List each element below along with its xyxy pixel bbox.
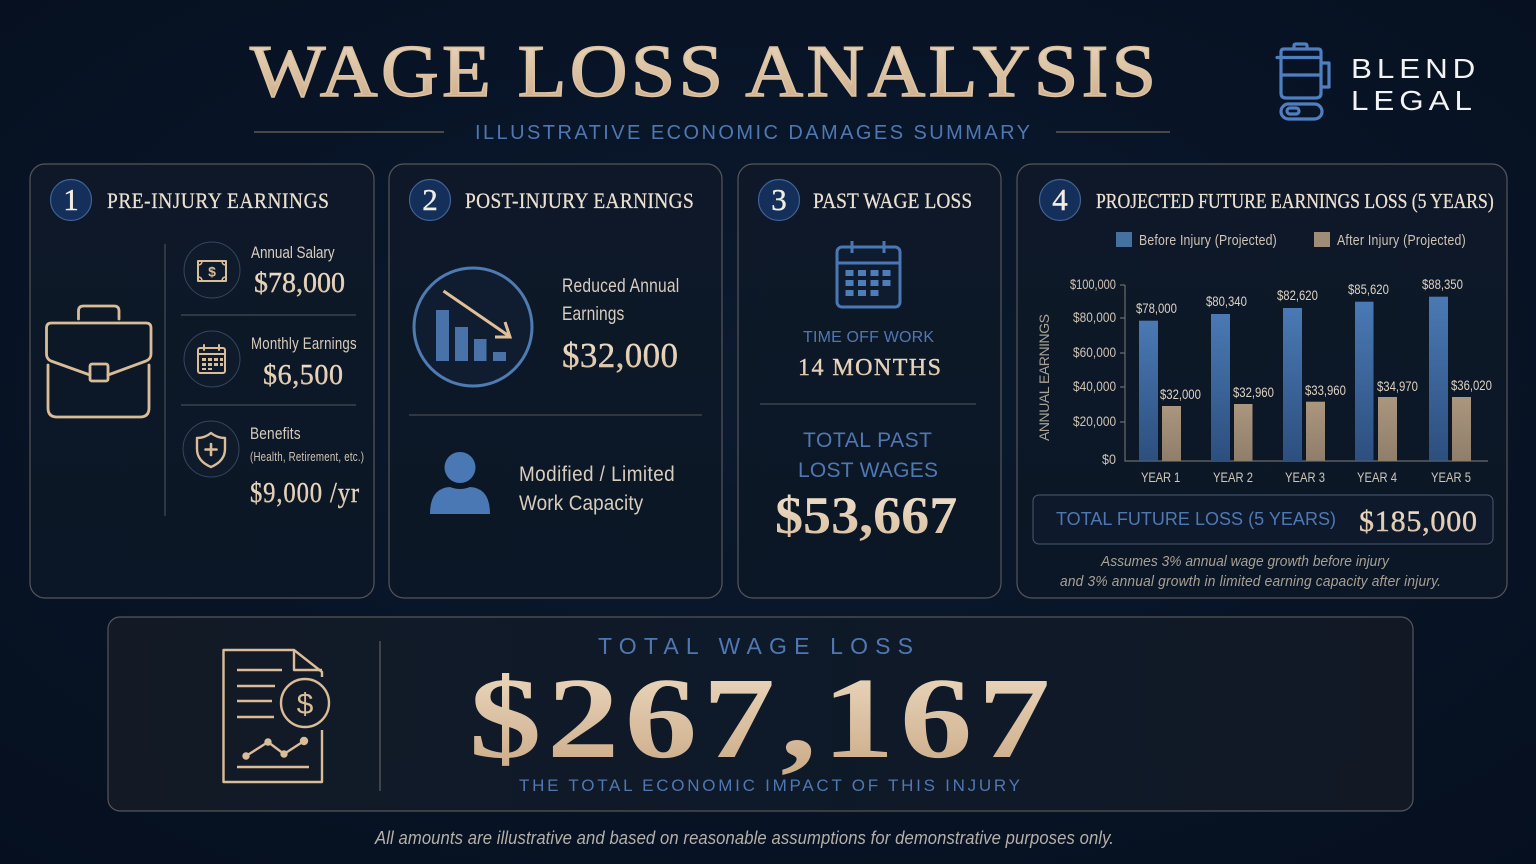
work capacity text: [519, 463, 675, 515]
row: monthly earnings: [184, 331, 357, 391]
bars: after injury: [1162, 397, 1471, 461]
number badge 2: 2: [422, 182, 438, 217]
value labels: $82,620: [1277, 287, 1318, 303]
number badge 4: [1040, 180, 1080, 220]
value labels: $78,000: [1136, 300, 1177, 316]
bar chart: $20,000: [1073, 413, 1116, 429]
heading: POST-INJURY EARNINGS: [465, 188, 694, 213]
row: annual salary: Annual Salary: [251, 244, 335, 262]
wordmark: BLEND: [1351, 54, 1475, 85]
reduced annual earnings: Earnings: [562, 303, 625, 324]
panel: total wage loss: [108, 617, 1413, 811]
icon: banknote: [184, 242, 240, 298]
number badge 1: [50, 180, 92, 220]
footer disclaimer: All amounts are illustrative and based on reasonable assumptions for demonstrative purposes only.: [374, 827, 1114, 848]
reduced annual earnings: Reduced Annual: [562, 275, 679, 296]
value labels: $36,020: [1451, 377, 1492, 393]
row: benefits: (Health, Retirement, etc.): [250, 451, 364, 464]
bar chart: [1036, 276, 1492, 485]
number badge 3: [758, 180, 800, 220]
heading: PAST WAGE LOSS: [813, 188, 972, 213]
total caption: THE TOTAL ECONOMIC IMPACT OF THIS INJURY: [519, 776, 1020, 795]
year labels: YEAR 2: [1213, 470, 1253, 485]
total future loss box: $185,000: [1359, 505, 1477, 538]
number badge 2: [410, 180, 450, 220]
year labels: [1141, 470, 1471, 485]
total past lost wages: TOTAL PAST: [803, 429, 932, 452]
icon: calendar: [184, 331, 240, 387]
icon: financial document: [224, 650, 329, 782]
row: monthly earnings: $6,500: [263, 360, 343, 391]
legend: [1116, 232, 1466, 248]
icon: declining bar chart: [414, 268, 532, 386]
assumptions note: [1060, 553, 1441, 589]
panel 2: post-injury earnings: [389, 164, 722, 598]
row: benefits: $9,000 /yr: [250, 478, 359, 508]
work capacity text: Work Capacity: [519, 492, 643, 515]
row: benefits: [183, 421, 364, 508]
time off work: [798, 329, 941, 381]
year labels: YEAR 3: [1285, 470, 1325, 485]
row: monthly earnings: Monthly Earnings: [251, 335, 357, 353]
title: WAGE LOSS ANALYSIS: [250, 30, 1156, 112]
value labels: $80,340: [1206, 293, 1247, 309]
wordmark: LEGAL: [1351, 86, 1472, 117]
icon: shield: [183, 421, 239, 477]
icon: banknote: $: [208, 264, 216, 280]
value labels: [1136, 276, 1492, 402]
row: benefits: Benefits: [250, 425, 301, 443]
value labels: $32,960: [1233, 384, 1274, 400]
time off work: 14 MONTHS: [798, 355, 941, 381]
heading: PROJECTED FUTURE EARNINGS LOSS (5 YEARS): [1096, 189, 1494, 213]
time off work: TIME OFF WORK: [803, 329, 934, 346]
total past lost wages: [775, 429, 957, 545]
value labels: $33,960: [1305, 382, 1346, 398]
total future loss box: TOTAL FUTURE LOSS (5 YEARS): [1056, 509, 1336, 529]
icon: calendar: [837, 241, 900, 307]
total future loss box: [1033, 495, 1493, 544]
number badge 1: 1: [63, 182, 79, 217]
bar chart: $0: [1102, 452, 1116, 467]
year labels: YEAR 5: [1431, 470, 1471, 485]
bar chart: ANNUAL EARNINGS: [1036, 314, 1052, 441]
year labels: YEAR 1: [1141, 470, 1180, 485]
number badge 4: 4: [1052, 182, 1068, 217]
bar chart: $80,000: [1073, 309, 1116, 325]
subtitle with side rules: ILLUSTRATIVE ECONOMIC DAMAGES SUMMARY: [475, 122, 1030, 144]
assumptions note: and 3% annual growth in limited earning capacity after injury.: [1060, 573, 1441, 589]
bar chart: $40,000: [1073, 378, 1116, 394]
logo: Blend Legal: [1277, 44, 1475, 119]
bar chart: $60,000: [1073, 344, 1116, 360]
work capacity text: Modified / Limited: [519, 463, 675, 486]
icon: person: [430, 452, 490, 514]
panel 1: pre-injury earnings: [30, 164, 374, 598]
heading: PRE-INJURY EARNINGS: [107, 188, 329, 213]
wordmark: [1351, 54, 1475, 117]
year labels: YEAR 4: [1357, 470, 1397, 485]
reduced annual earnings: $32,000: [562, 336, 678, 375]
row: annual salary: [184, 242, 345, 299]
icon: blender: [1277, 44, 1329, 119]
total label: TOTAL WAGE LOSS: [598, 633, 913, 659]
bar chart: $100,000: [1070, 277, 1116, 292]
panel 3: past wage loss: [738, 164, 1001, 598]
row: annual salary: $78,000: [254, 268, 345, 299]
icon: financial document: $: [297, 688, 314, 721]
assumptions note: Assumes 3% annual wage growth before injury: [1100, 553, 1390, 569]
reduced annual earnings: [562, 275, 679, 375]
legend: Before Injury (Projected): [1139, 232, 1277, 248]
value labels: $88,350: [1422, 276, 1463, 292]
value labels: $34,970: [1377, 378, 1418, 394]
value labels: $85,620: [1348, 281, 1389, 297]
icon: briefcase: [46, 306, 151, 417]
panel 4: projected future earnings loss: [1017, 164, 1507, 598]
total amount: $267,167: [469, 655, 1050, 783]
total past lost wages: $53,667: [775, 485, 957, 545]
number badge 3: 3: [771, 182, 787, 217]
legend: After Injury (Projected): [1337, 232, 1466, 248]
total past lost wages: LOST WAGES: [798, 459, 938, 482]
value labels: $32,000: [1160, 386, 1201, 402]
bars: before injury: [1139, 297, 1448, 461]
